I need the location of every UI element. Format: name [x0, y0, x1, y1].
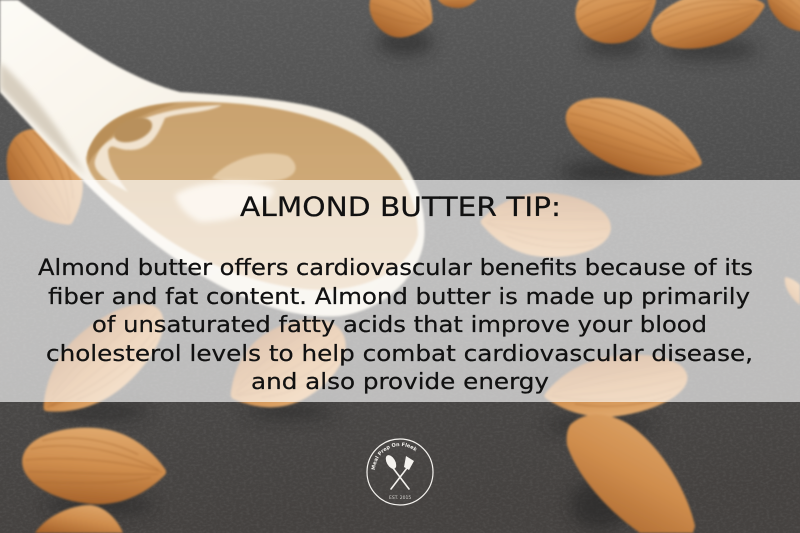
logo: Meal Prep On Fleek badge — [366, 438, 434, 506]
almond: top centre — [359, 0, 445, 49]
almond: bottom left — [19, 422, 169, 510]
almond: lower left in band — [22, 284, 182, 436]
butter swirl lower — [175, 182, 275, 222]
almond butter — [86, 102, 418, 290]
spoon with almond butter — [0, 0, 425, 316]
almond: right middle — [555, 81, 713, 195]
almond: bottom right — [567, 414, 695, 533]
butter highlight left — [95, 105, 222, 192]
logo: Meal Prep On Fleek badge: EST. 2015 — [389, 495, 411, 501]
almond: left behind spoon — [0, 116, 101, 241]
body text: Almond butter offers cardiovascular benefits because of its — [38, 256, 753, 281]
almond: behind band right — [479, 190, 613, 260]
almond: lower right in band — [540, 346, 691, 426]
logo icon: crossed spoon and fork — [384, 453, 414, 489]
almond: top right 2 — [645, 0, 771, 59]
almond: top small — [437, 0, 479, 8]
translucent text band — [0, 180, 800, 402]
almond: right edge — [785, 277, 800, 305]
logo text — [375, 446, 425, 478]
butter rim dark — [88, 103, 180, 165]
almond: top right corner — [758, 0, 800, 44]
body text — [38, 256, 753, 395]
body text: fiber and fat content. Almond butter is made up primarily — [48, 285, 750, 310]
almond: top right 1 — [568, 0, 664, 52]
almond: lower centre in band — [212, 300, 361, 430]
logo: Meal Prep On Fleek badge: Meal Prep On Fleek — [371, 442, 417, 470]
body text: of unsaturated fatty acids that improve your blood — [92, 313, 707, 338]
spoon body — [0, 0, 425, 316]
body text: and also provide energy — [251, 370, 549, 395]
body text: cholesterol levels to help combat cardiovascular disease, — [46, 342, 753, 367]
title: ALMOND BUTTER TIP: — [240, 192, 561, 223]
butter swirl — [212, 153, 296, 183]
almond: bottom left lower — [35, 505, 123, 533]
spoon handle shadow — [0, 62, 85, 175]
butter hole — [110, 113, 156, 147]
